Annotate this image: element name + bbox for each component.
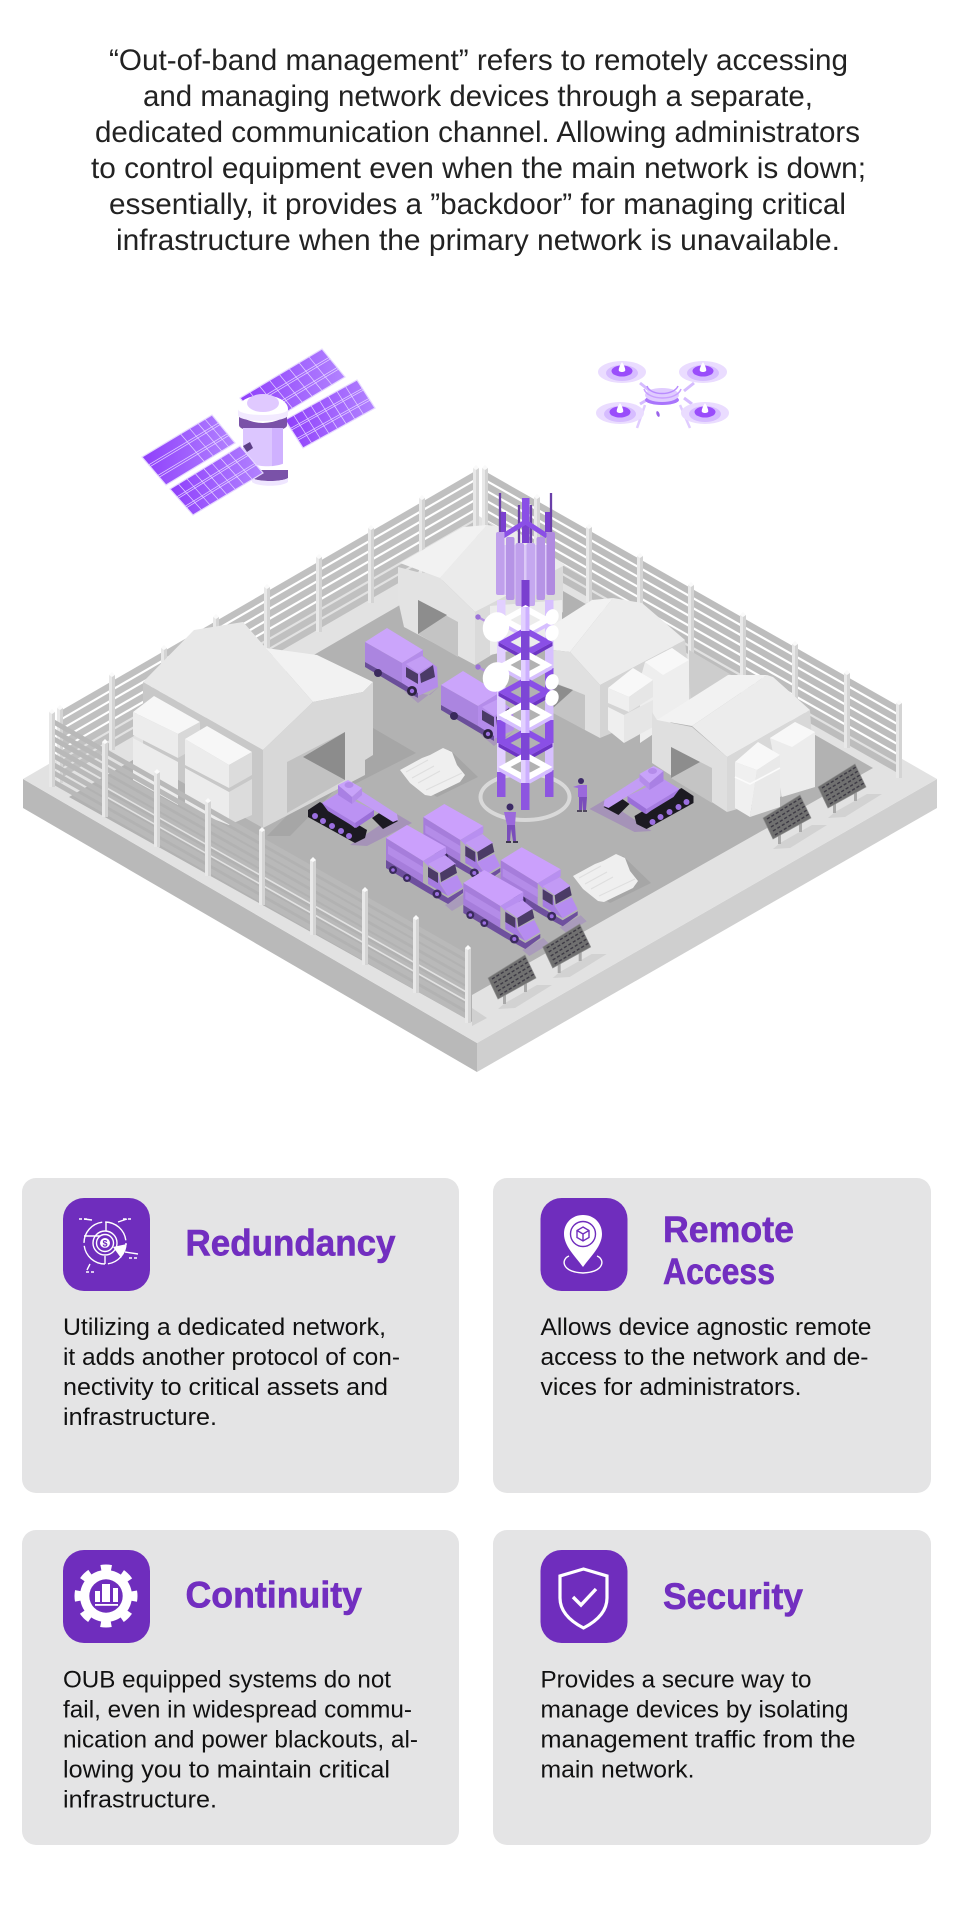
body text: infrastructure. <box>63 1786 217 1813</box>
tank: right <box>590 766 694 832</box>
body text: manage devices by isolating <box>540 1696 848 1723</box>
dishes <box>475 607 561 708</box>
body text: Provides a secure way to <box>540 1666 812 1693</box>
truck: left <box>386 825 472 911</box>
illustration: isometric military base <box>23 465 937 1072</box>
intro text block: dedicated communication channel. Allowing administrators <box>95 116 860 149</box>
solar panel 4 <box>818 764 882 818</box>
body text: access to the network and de- <box>540 1344 868 1371</box>
icon: gear with chart <box>63 1550 150 1643</box>
truck: upper <box>423 804 509 890</box>
tank: left <box>308 780 412 846</box>
icon: location pin <box>540 1198 628 1291</box>
truck: behind tower <box>441 671 516 746</box>
body text: vices for administrators. <box>540 1374 802 1401</box>
solar panel 2 <box>543 924 607 978</box>
truck: back left <box>365 628 440 703</box>
body text <box>63 1314 400 1431</box>
heading: Security <box>663 1576 803 1617</box>
solar panel 1 <box>488 955 552 1009</box>
front left fence <box>49 709 487 1026</box>
brick pile: right <box>573 854 651 903</box>
ground ring <box>480 774 570 820</box>
brick pile: near tower <box>400 748 478 797</box>
panel: Continuity <box>22 1530 459 1845</box>
body text: nectivity to critical assets and <box>63 1374 388 1401</box>
body text <box>540 1666 856 1783</box>
icon: shield check <box>540 1550 628 1643</box>
intro text block: essentially, it provides a ”backdoor” for managing critical <box>109 188 846 221</box>
intro text block: infrastructure when the primary network is unavailable. <box>116 224 840 257</box>
body text: it adds another protocol of con- <box>63 1344 400 1371</box>
icon: satellite <box>142 349 375 515</box>
warehouse: right <box>652 675 815 817</box>
intro text block: and managing network devices through a separate, <box>143 80 813 113</box>
warehouse shadows on ground <box>267 728 416 836</box>
body text: nication and power blackouts, al- <box>63 1726 418 1753</box>
body text: infrastructure. <box>63 1404 217 1431</box>
telecom tower <box>475 493 561 810</box>
body text: fail, even in widespread commu- <box>63 1696 412 1723</box>
body text <box>540 1314 872 1401</box>
heading: Redundancy <box>186 1222 396 1264</box>
intro text block <box>91 44 866 257</box>
icon: drone <box>596 361 729 428</box>
intro text block: to control equipment even when the main network is down; <box>91 152 866 185</box>
panel: Remote Access <box>493 1178 931 1493</box>
warehouse: middle right <box>553 598 740 743</box>
panel: Security <box>493 1530 931 1845</box>
body text <box>63 1666 418 1813</box>
panel: Redundancy <box>22 1178 459 1493</box>
body text: Allows device agnostic remote <box>540 1314 872 1341</box>
icon: redundancy chart: $ <box>102 1238 108 1248</box>
body text: lowing you to maintain critical <box>63 1756 390 1783</box>
back right fence <box>482 465 902 778</box>
tower columns <box>497 600 506 772</box>
tower antennas <box>496 532 555 607</box>
heading: Continuity <box>186 1574 362 1616</box>
body text: main network. <box>540 1756 694 1783</box>
body text: Utilizing a dedicated network, <box>63 1314 386 1341</box>
solar panel 3 <box>763 795 827 849</box>
tower lattice rings <box>498 605 552 786</box>
body text: OUB equipped systems do not <box>63 1666 391 1693</box>
warehouse: back centre <box>398 525 565 665</box>
heading: Access <box>663 1251 775 1292</box>
platform <box>23 515 937 1072</box>
tower masts <box>500 493 551 543</box>
icon: redundancy chart <box>63 1198 150 1291</box>
body text: management traffic from the <box>540 1726 856 1753</box>
intro text block: “Out-of-band management” refers to remotely accessing <box>109 44 848 77</box>
tower centre column <box>521 607 530 783</box>
heading <box>663 1209 794 1292</box>
truck: front <box>463 870 549 956</box>
back left fence <box>57 465 479 783</box>
truck: right <box>501 847 587 933</box>
warehouse: big left <box>133 622 373 828</box>
person: front of tower <box>504 804 518 842</box>
ground <box>69 551 873 1022</box>
heading: Remote <box>663 1209 794 1250</box>
person: right of tower <box>573 778 587 811</box>
